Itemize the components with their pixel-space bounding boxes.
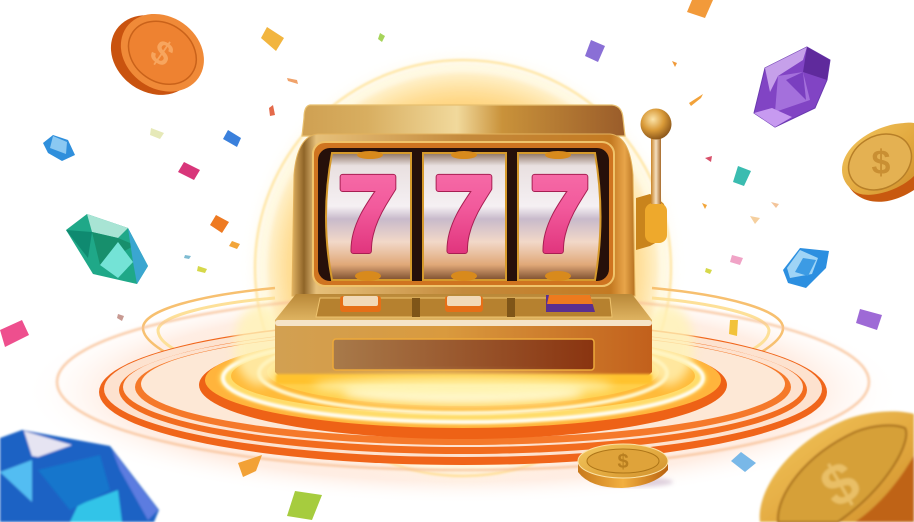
- gem: small blue right: [783, 248, 829, 288]
- upper thin ring left arc: [143, 288, 275, 364]
- coin: bottom right large: $: [810, 448, 870, 521]
- button left: [340, 296, 381, 312]
- base top highlight: [275, 320, 652, 326]
- gem: small blue left: [43, 135, 75, 161]
- coin: top left orange: $: [143, 33, 181, 75]
- floor glow: [23, 280, 903, 504]
- button deck: [275, 294, 652, 326]
- button right: [546, 295, 595, 312]
- coin: top left orange: [95, 0, 219, 114]
- coin: bottom centre: $: [617, 451, 629, 473]
- coin: bottom centre: [578, 444, 673, 488]
- reel 2: [423, 151, 506, 281]
- gem: green: [66, 214, 148, 284]
- coin: right gold: [838, 123, 914, 202]
- reel 2: 7: [434, 153, 494, 274]
- lever: [636, 108, 672, 250]
- orange energy rings: [99, 319, 827, 465]
- reel 1: [326, 151, 411, 281]
- glow under machine: [313, 376, 613, 396]
- reel 2: 7: [434, 153, 494, 274]
- cabinet body: [292, 134, 635, 296]
- side glow around base: [234, 305, 694, 385]
- button middle: [445, 296, 483, 312]
- gem: large blue bottom left: [0, 430, 159, 522]
- reel 3: 7: [530, 153, 590, 274]
- reel window: [318, 148, 609, 281]
- hood: [302, 105, 625, 136]
- gem: purple: [754, 47, 830, 127]
- outer thin ring: [57, 294, 869, 470]
- bright golden rings: [219, 332, 707, 424]
- base foot: [276, 374, 652, 384]
- halo behind machine: [243, 48, 683, 488]
- slot machine: [275, 105, 672, 384]
- display panel: [333, 339, 594, 370]
- reel 1: 7: [338, 153, 398, 274]
- coin: bottom right large: [760, 411, 914, 522]
- reel window frame: [313, 142, 614, 286]
- deck dividers: [412, 298, 515, 317]
- base front: [275, 321, 652, 378]
- reel 1: 7: [338, 153, 398, 274]
- reel 3: 7: [530, 153, 590, 274]
- coin: right gold: $: [872, 144, 891, 182]
- upper thin ring right arc: [652, 288, 783, 364]
- button tray: [316, 298, 612, 317]
- reel 3: [518, 151, 600, 281]
